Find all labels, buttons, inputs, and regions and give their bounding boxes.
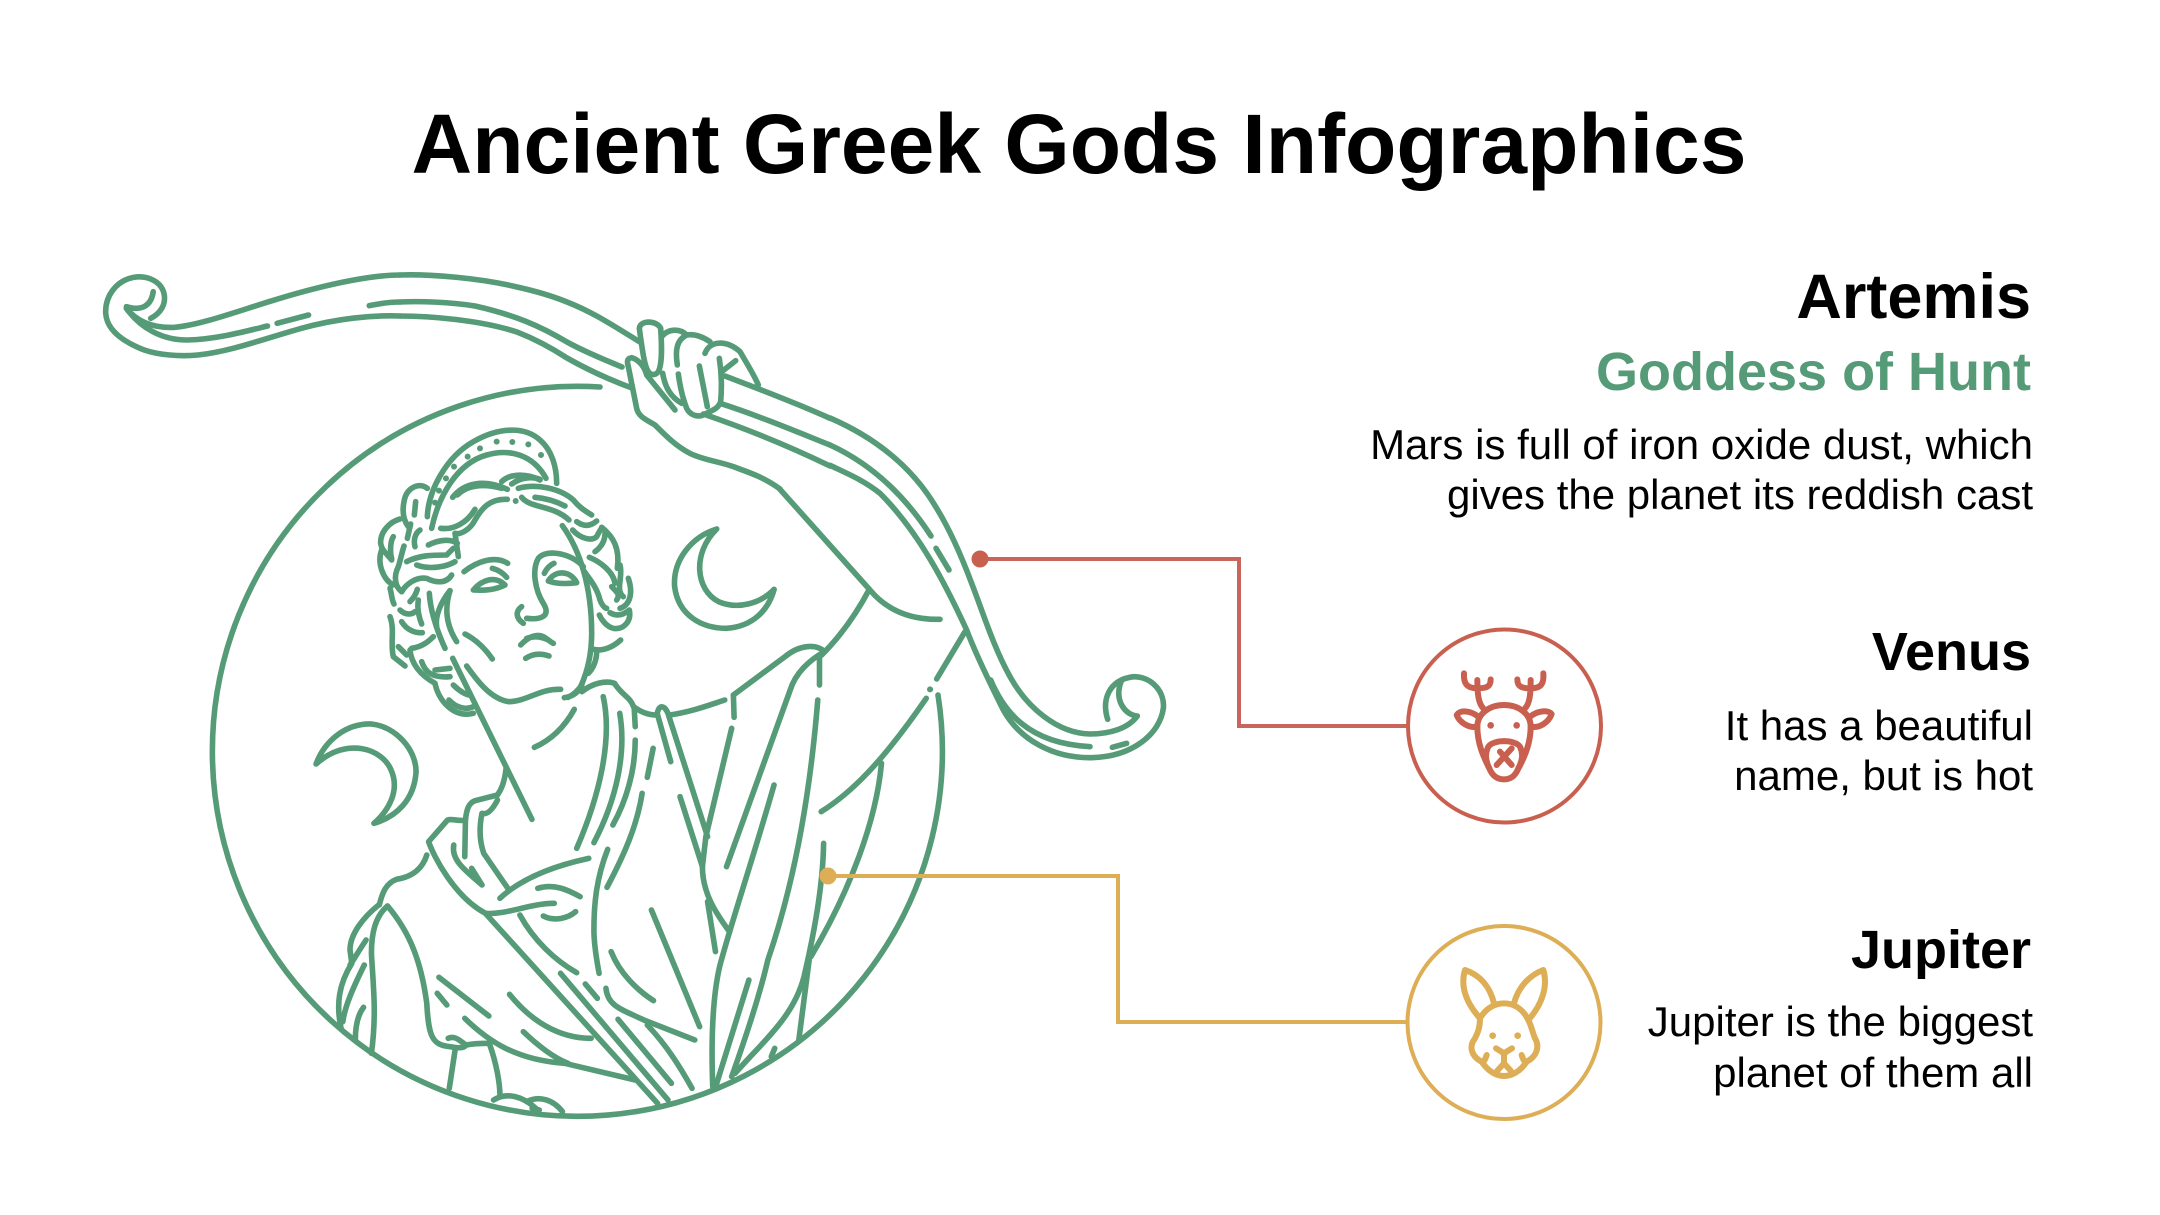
bow limb approaching the hand	[400, 275, 640, 388]
text block: Venus: name, but is hot	[1734, 752, 2033, 799]
text block: Jupiter: Jupiter is the biggest	[1648, 998, 2033, 1045]
head, hair and diadem	[380, 430, 631, 714]
text block: Artemis: Artemis	[1796, 262, 2031, 332]
connector: red to Venus	[972, 550, 1408, 726]
text block: Artemis: Goddess of Hunt	[1596, 342, 2031, 402]
crescent moon right	[674, 529, 774, 628]
bow right limb and arm	[780, 418, 1163, 758]
text block: Artemis	[1370, 262, 2033, 518]
icon: rabbit in gold circle	[1408, 926, 1600, 1119]
bow left limb	[106, 275, 400, 356]
left crescent moon, sleeve and lower arm	[316, 724, 562, 1112]
text block: Artemis: gives the planet its reddish cast	[1447, 471, 2033, 518]
text block: Jupiter: Jupiter	[1851, 920, 2031, 980]
drapery and torso	[429, 646, 932, 1103]
icon: deer in red circle	[1408, 630, 1601, 822]
hand gripping the bow	[627, 322, 830, 489]
text block: Jupiter: planet of them all	[1713, 1049, 2033, 1096]
text block: Artemis: Mars is full of iron oxide dust, which	[1370, 421, 2033, 468]
text block: Jupiter	[1648, 920, 2033, 1096]
illustration: Artemis with bow	[106, 275, 1163, 1116]
medallion circle	[212, 386, 942, 1116]
text block: Venus: It has a beautiful	[1725, 702, 2033, 749]
text block: Venus: Venus	[1872, 622, 2031, 682]
text block: Venus	[1725, 622, 2033, 799]
title: Ancient Greek Gods Infographics	[412, 97, 1746, 191]
connector: gold to Jupiter	[820, 868, 1408, 1022]
